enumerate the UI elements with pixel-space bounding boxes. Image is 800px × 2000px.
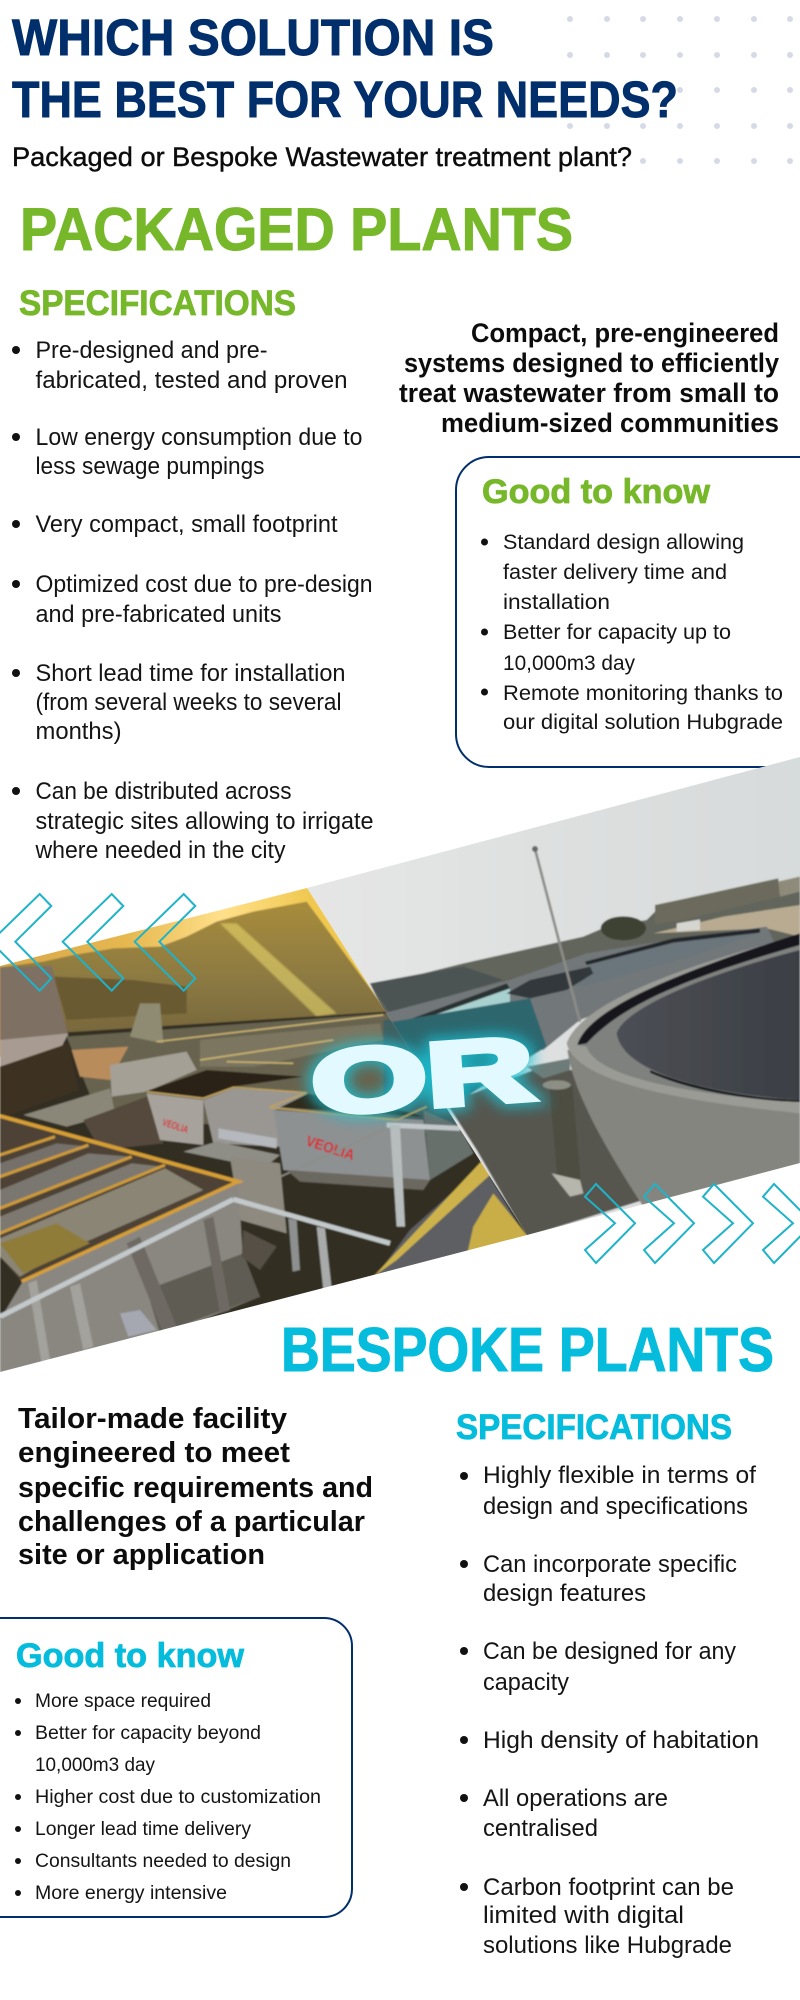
lower concrete wall: [0, 1183, 260, 1373]
heading: specifications: SPECIFICATIONS: [19, 284, 296, 323]
decorative dot grid: [567, 16, 793, 164]
specification list: [460, 1462, 759, 1959]
or label: OR: [308, 1019, 537, 1134]
yellow walkway: [377, 1176, 518, 1274]
panel: bespoke specifications: [456, 1408, 759, 1959]
specification list: capacity: [483, 1669, 569, 1696]
far tanks: [383, 927, 777, 1050]
intro: packaged description: Compact, pre-engineered: [471, 318, 779, 348]
specification list: Short lead time for installation: [36, 660, 346, 687]
intro: bespoke description: Tailor-made facility: [18, 1403, 287, 1435]
good to know list: faster delivery time and: [503, 560, 727, 584]
grey tanks: [147, 1093, 203, 1145]
good to know list: 10,000m3 day: [35, 1755, 155, 1776]
gravel ground: [447, 1070, 643, 1237]
good to know list: More energy intensive: [35, 1883, 227, 1904]
good to know list: Consultants needed to design: [35, 1851, 291, 1872]
specification list: Optimized cost due to pre-design: [36, 571, 372, 598]
good to know list: installation: [503, 590, 610, 614]
pipe: [549, 1086, 581, 1182]
screen machine: [110, 1052, 197, 1097]
specification list: Low energy consumption due to: [36, 424, 362, 451]
big tank wall: [567, 1050, 800, 1207]
specification list: less sewage pumpings: [36, 453, 264, 480]
VEOLIA sign left: VEOLIA: [161, 1117, 189, 1136]
specification list: All operations are: [483, 1785, 668, 1812]
good to know list: More space required: [35, 1691, 211, 1712]
or label: [308, 1019, 537, 1134]
title: [12, 9, 678, 128]
good to know list: 10,000m3 day: [503, 651, 635, 675]
title: WHICH SOLUTION IS: [12, 9, 494, 66]
horizon: [370, 891, 800, 1014]
icon: left chevrons: [0, 894, 195, 991]
specification list: Very compact, small footprint: [36, 511, 338, 538]
midground: [67, 1013, 447, 1133]
photo: packaged plant units (left): [0, 870, 547, 1380]
intro: packaged description: treat wastewater from small to: [399, 378, 779, 408]
photo: clarifier tanks (right): [307, 757, 800, 1235]
intro: packaged description: systems designed to efficiently: [404, 348, 779, 378]
specification list: Carbon footprint can be: [483, 1874, 734, 1901]
specification list: (from several weeks to several: [36, 689, 342, 716]
under-tank structure: [230, 1157, 287, 1233]
good to know list: Standard design allowing: [503, 530, 744, 554]
water: [617, 950, 800, 1100]
heading: good to know: Good to know: [16, 1637, 245, 1675]
specification list: and pre-fabricated units: [36, 601, 282, 628]
panel: bespoke good to know: [0, 1618, 352, 1917]
rim: [567, 935, 800, 1113]
subtitle: Packaged or Bespoke Wastewater treatment plant?: [12, 142, 632, 172]
specification list: design features: [483, 1580, 646, 1607]
specification list: Can be designed for any: [483, 1638, 736, 1665]
VEOLIA sign right: VEOLIA: [304, 1134, 357, 1164]
specification list: where needed in the city: [35, 837, 286, 864]
good to know list: [481, 530, 783, 734]
storage tank: [0, 966, 68, 1043]
heading: good to know: Good to know: [482, 473, 711, 511]
intro: packaged description: [399, 318, 779, 438]
specification list: Highly flexible in terms of: [483, 1462, 756, 1489]
specification list: strategic sites allowing to irrigate: [36, 808, 374, 835]
specification list: months): [36, 718, 122, 745]
inner trough: [577, 942, 800, 1102]
good to know list: Better for capacity up to: [503, 620, 731, 644]
aeration basin: [0, 1115, 238, 1282]
good to know list: [15, 1691, 321, 1904]
intro: bespoke description: site or application: [18, 1539, 265, 1571]
walkway: [23, 1088, 115, 1127]
intro: bespoke description: engineered to meet: [18, 1437, 290, 1469]
specification list: solutions like Hubgrade: [483, 1932, 732, 1959]
specification list: Can be distributed across: [36, 778, 292, 805]
pipe rails: [0, 1125, 460, 1317]
specification list: Pre-designed and pre-: [36, 337, 268, 364]
good to know list: Longer lead time delivery: [35, 1819, 251, 1840]
sun ray: [220, 923, 337, 1017]
dark base: [0, 1011, 527, 1321]
specification list: limited with digital: [483, 1902, 684, 1929]
icon: right chevrons: [585, 1184, 800, 1263]
dark tank interior: [145, 1070, 303, 1098]
intro: packaged description: medium-sized communities: [441, 408, 779, 438]
specification list: centralised: [483, 1815, 598, 1842]
specification list: [12, 337, 374, 864]
intro: bespoke description: [18, 1403, 373, 1571]
heading: packaged plants: PACKAGED PLANTS: [20, 196, 573, 263]
panel: packaged specifications: [12, 284, 374, 864]
intro: bespoke description: specific requirements and: [18, 1472, 373, 1504]
title: THE BEST FOR YOUR NEEDS?: [12, 71, 678, 128]
pole: [535, 849, 580, 1022]
specification list: fabricated, tested and proven: [36, 367, 348, 394]
good to know list: our digital solution Hubgrade: [503, 710, 783, 734]
specification list: Can incorporate specific: [483, 1551, 737, 1578]
good to know list: Higher cost due to customization: [35, 1787, 321, 1808]
heading: specifications: SPECIFICATIONS: [456, 1408, 732, 1447]
hills: [2, 901, 386, 1034]
good to know list: Remote monitoring thanks to: [503, 681, 783, 705]
specification list: design and specifications: [483, 1493, 748, 1520]
panel: packaged good to know: [456, 457, 800, 767]
or label: OR: [308, 1019, 537, 1134]
specification list: High density of habitation: [483, 1727, 759, 1754]
good to know list: Better for capacity beyond: [35, 1723, 261, 1744]
intro: bespoke description: challenges of a particular: [18, 1506, 365, 1538]
